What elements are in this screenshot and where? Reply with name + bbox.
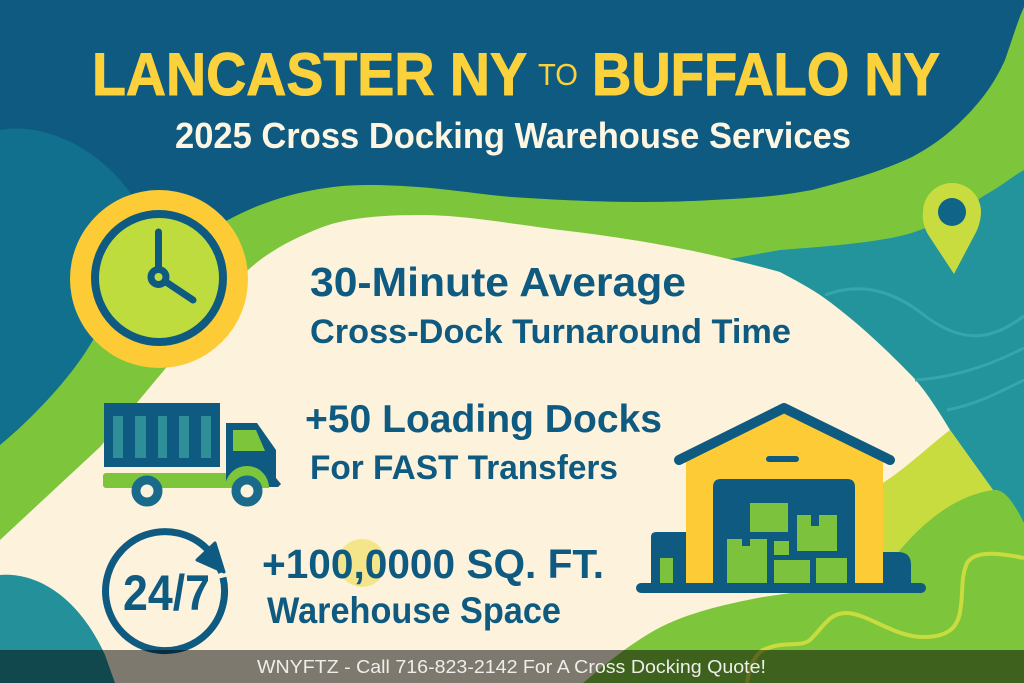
background: bottom-left teal blob — [0, 575, 115, 683]
footer bar — [0, 650, 1024, 683]
icon: location pin — [923, 183, 981, 274]
text: loading docks — [305, 398, 662, 487]
title: TO — [538, 57, 578, 92]
title: LANCASTER NY — [92, 41, 527, 108]
text: 30-minute turnaround: 30-Minute Average — [310, 259, 686, 305]
background: green band — [0, 7, 1024, 552]
text: warehouse space: +100,0000 SQ. FT. — [262, 541, 604, 587]
background: left teal blob — [0, 128, 135, 445]
title — [92, 41, 940, 108]
footer bar: WNYFTZ - Call 716-823-2142 For A Cross Docking Quote! — [257, 657, 766, 677]
icon: clock — [70, 190, 248, 368]
icon: truck — [103, 403, 281, 502]
text: 30-minute turnaround: Cross-Dock Turnaround Time — [310, 313, 791, 351]
background: cream panel — [0, 215, 1024, 683]
subtitle: 2025 Cross Docking Warehouse Services — [175, 115, 851, 156]
text: loading docks: For FAST Transfers — [310, 449, 618, 487]
background: lime hill — [860, 430, 1024, 600]
text: loading docks: +50 Loading Docks — [305, 398, 662, 441]
text: warehouse space: Warehouse Space — [267, 590, 561, 631]
background: right teal area — [700, 130, 1024, 683]
map waves — [825, 289, 1024, 410]
icon: 24/7 circular arrow — [106, 532, 225, 651]
icon: warehouse — [636, 408, 926, 593]
road line — [747, 554, 1024, 683]
background: green hill — [583, 490, 1024, 683]
icon: 24/7 circular arrow: 24/7 — [123, 565, 210, 621]
text: 30-minute turnaround — [310, 259, 791, 351]
text: warehouse space — [262, 541, 604, 631]
highlight spot — [338, 539, 386, 587]
title: BUFFALO NY — [592, 41, 940, 108]
